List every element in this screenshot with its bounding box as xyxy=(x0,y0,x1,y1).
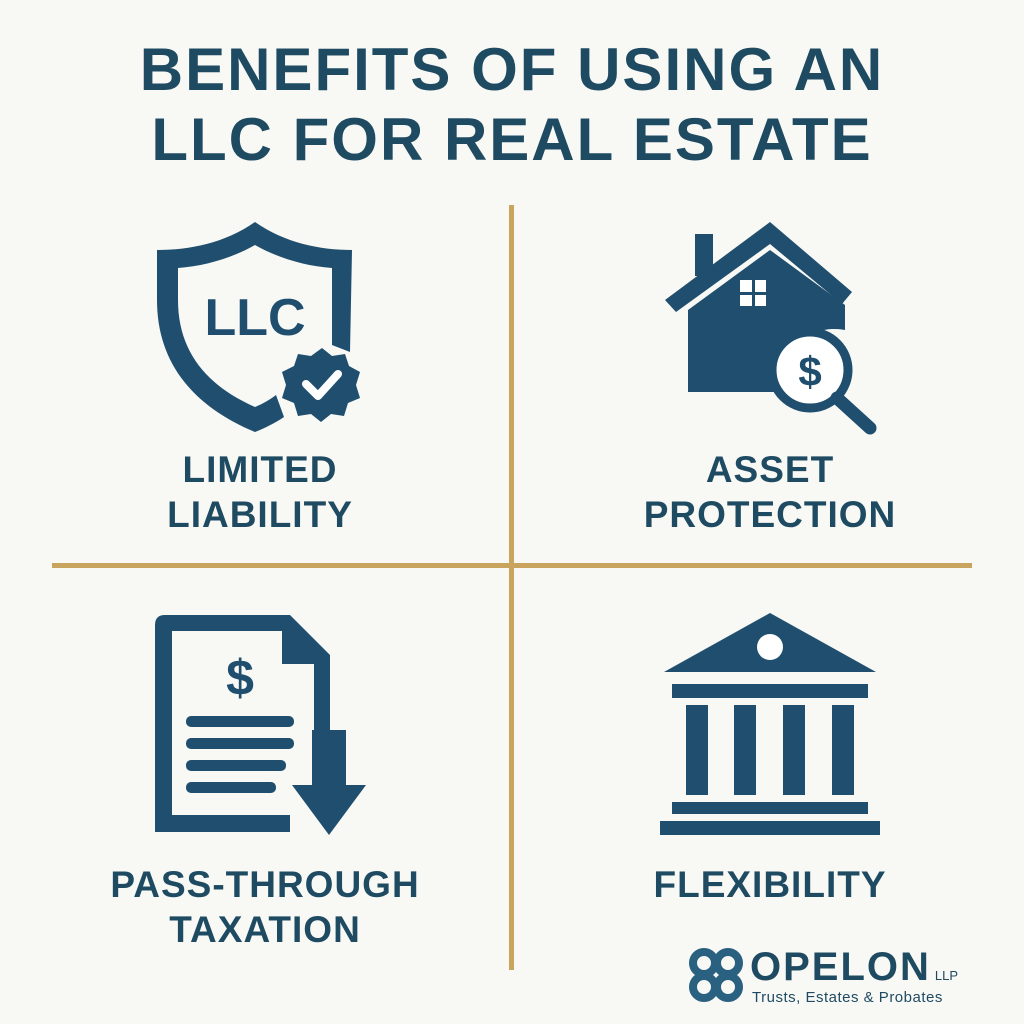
label: asset protection xyxy=(644,449,896,535)
icon: shield LLC xyxy=(157,222,360,432)
label: pass-through taxation: PASS-THROUGH xyxy=(110,864,420,905)
title: LLC FOR REAL ESTATE xyxy=(151,106,873,173)
label: pass-through taxation xyxy=(110,864,420,950)
icon: bank xyxy=(660,613,880,835)
label: asset protection: PROTECTION xyxy=(644,494,896,535)
label: limited liability xyxy=(167,449,353,535)
icon: knot logo xyxy=(689,948,743,1002)
icon: house with magnifier xyxy=(665,222,870,428)
logo: OPELON LLP xyxy=(750,945,958,989)
logo xyxy=(689,945,958,1006)
label: flexibility: FLEXIBILITY xyxy=(654,864,886,905)
icon: shield LLC: LLC xyxy=(204,289,306,347)
label: pass-through taxation: TAXATION xyxy=(169,909,361,950)
label: limited liability: LIMITED xyxy=(182,449,337,490)
title xyxy=(140,36,884,173)
logo: Trusts, Estates & Probates xyxy=(752,989,943,1006)
icon: tax document: $ xyxy=(226,650,254,706)
icon: tax document xyxy=(155,615,366,835)
title: BENEFITS OF USING AN xyxy=(140,36,884,103)
icon: house with magnifier: $ xyxy=(798,348,822,395)
label: limited liability: LIABILITY xyxy=(167,494,353,535)
label: asset protection: ASSET xyxy=(706,449,834,490)
